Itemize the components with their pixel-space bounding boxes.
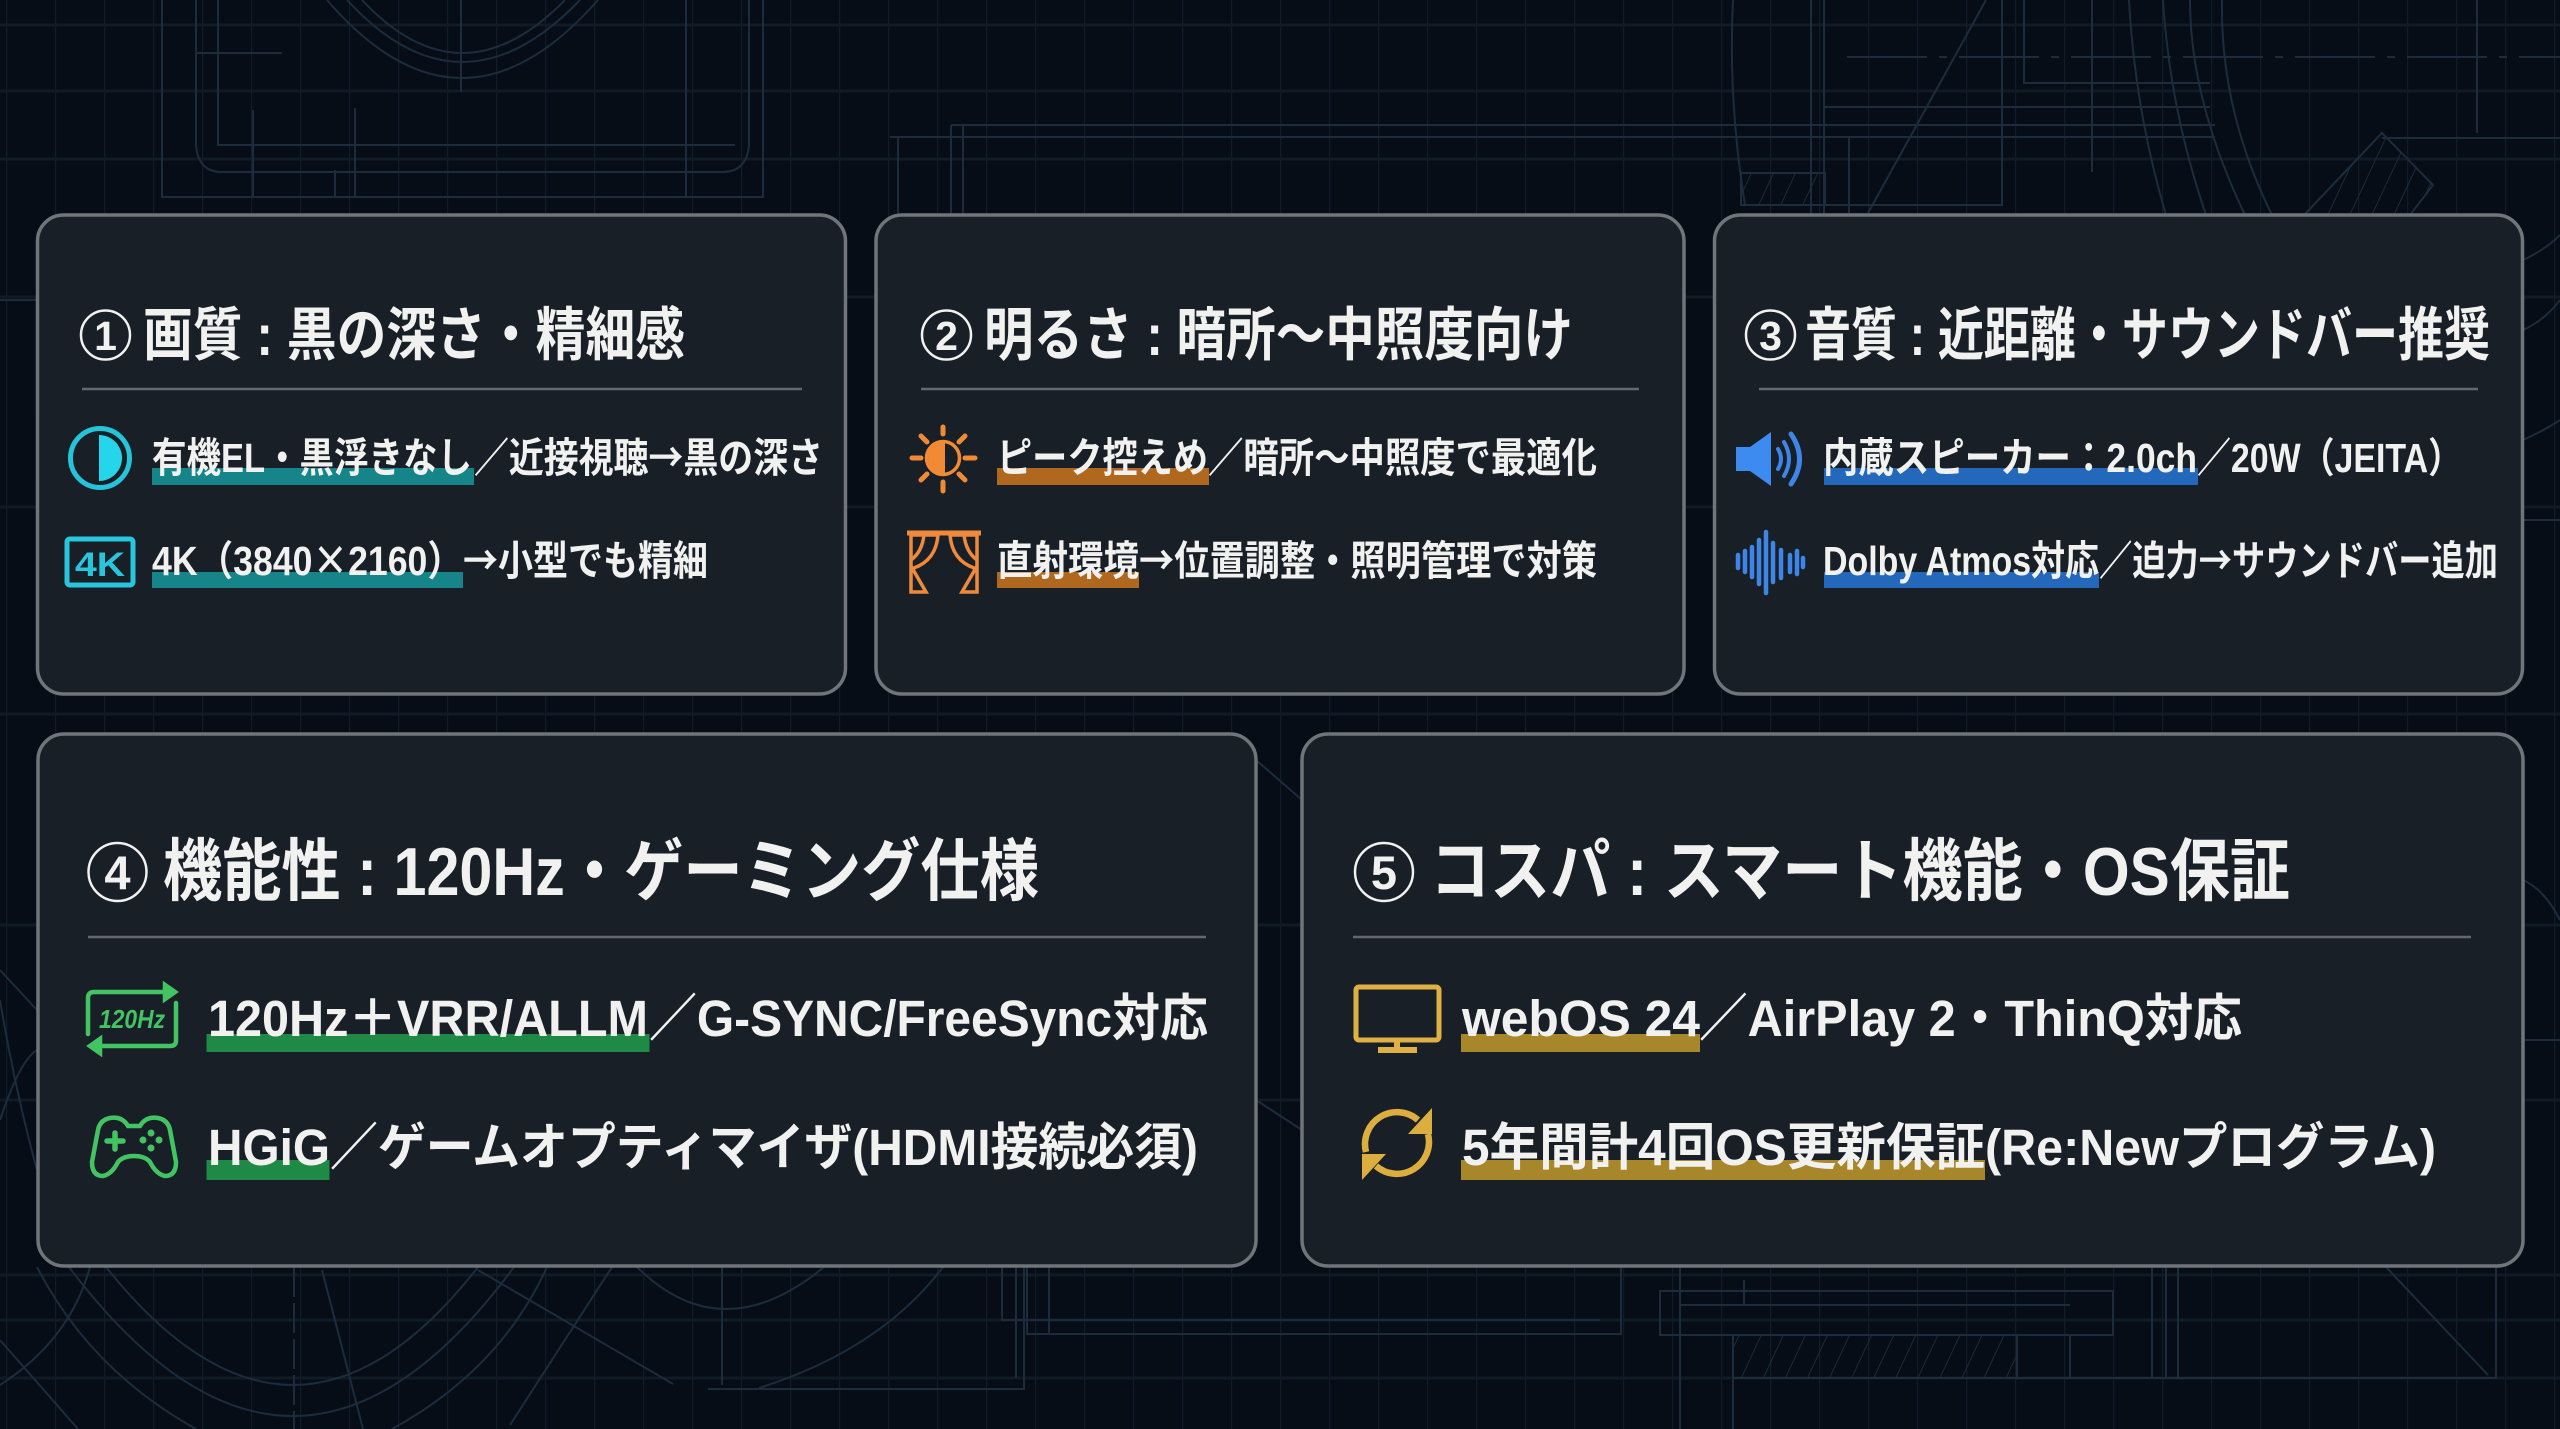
row: HGiG: HGiG bbox=[208, 1119, 330, 1176]
icon: speaker bbox=[1736, 432, 1800, 486]
row: OS update guarantee bbox=[1461, 1119, 2436, 1180]
icon: monitor bbox=[1356, 987, 1439, 1050]
row: peak brightness: ピーク控えめ bbox=[997, 435, 1208, 481]
panel 4: features bbox=[38, 734, 1256, 1266]
row: direct sunlight bbox=[997, 527, 1597, 588]
icon: 4K badge bbox=[67, 539, 133, 585]
row: built-in speakers: ／20W（JEITA） bbox=[2197, 435, 2462, 481]
icon: update arrows bbox=[1362, 1108, 1432, 1180]
row: built-in speakers bbox=[1823, 435, 2462, 485]
row: OLED black level bbox=[152, 424, 823, 485]
row: webOS: ／AirPlay 2・ThinQ対応 bbox=[1699, 990, 2242, 1047]
heading 4: 機能性 : 120Hz・ゲーミング仕様 bbox=[163, 834, 1039, 910]
heading 5: 5 bbox=[1371, 846, 1397, 899]
heading 4: 4 bbox=[104, 846, 131, 899]
row: Dolby Atmos: ／迫力→サウンドバー追加 bbox=[2099, 527, 2498, 587]
row: direct sunlight: →位置調整・照明管理で対策 bbox=[1139, 527, 1597, 587]
row: HGiG: ／ゲームオプティマイザ(HDMI接続必須) bbox=[330, 1119, 1198, 1176]
row: built-in speakers: 内蔵スピーカー：2.0ch bbox=[1823, 435, 2197, 481]
row: 120Hz VRR: 120Hz＋VRR/ALLM bbox=[208, 990, 648, 1047]
icon: half contrast circle bbox=[70, 428, 130, 488]
row: 4K resolution: 4K（3840×2160） bbox=[152, 527, 463, 587]
icon: 4K badge: 4K bbox=[75, 546, 126, 584]
row: 4K resolution: →小型でも精細 bbox=[463, 527, 708, 587]
heading 3: 3 bbox=[1759, 313, 1782, 359]
icon: 120Hz refresh: 120Hz bbox=[99, 1004, 165, 1034]
row: Dolby Atmos bbox=[1823, 527, 2498, 588]
row: Dolby Atmos: Dolby Atmos対応 bbox=[1823, 538, 2099, 584]
heading 1: 1 bbox=[94, 313, 117, 359]
row: peak brightness: ／暗所〜中照度で最適化 bbox=[1208, 435, 1597, 481]
icon: curtains bbox=[907, 533, 981, 592]
row: OLED black level: 有機EL・黒浮きなし bbox=[152, 435, 472, 481]
heading 5: コスパ : スマート機能・OS保証 bbox=[1430, 834, 2290, 910]
heading 2: 明るさ : 暗所〜中照度向け bbox=[984, 303, 1573, 368]
icon: 120Hz refresh bbox=[88, 985, 176, 1053]
row: peak brightness bbox=[997, 435, 1597, 485]
heading 2: 2 bbox=[935, 313, 958, 359]
icon: sun bbox=[912, 427, 975, 491]
panel 5: value bbox=[1302, 734, 2523, 1266]
panel 3: sound bbox=[1714, 215, 2522, 694]
row: OS update guarantee: 5年間計4回OS更新保証 bbox=[1462, 1119, 1985, 1176]
row: webOS: webOS 24 bbox=[1461, 990, 1701, 1047]
row: webOS bbox=[1461, 990, 2242, 1052]
panel 1: picture quality bbox=[38, 215, 846, 694]
row: OS update guarantee: (Re:Newプログラム) bbox=[1985, 1119, 2436, 1176]
row: OLED black level: ／近接視聴→黒の深さ bbox=[474, 424, 823, 484]
row: direct sunlight: 直射環境 bbox=[997, 538, 1139, 584]
panel 2: brightness bbox=[876, 215, 1684, 694]
icon: sound wave bbox=[1738, 532, 1803, 593]
row: 4K resolution bbox=[152, 527, 708, 588]
row: 120Hz VRR bbox=[206, 990, 1208, 1052]
row: 120Hz VRR: ／G-SYNC/FreeSync対応 bbox=[649, 990, 1208, 1047]
heading 1: 画質 : 黒の深さ・精細感 bbox=[143, 303, 685, 368]
icon: gamepad bbox=[92, 1118, 176, 1176]
